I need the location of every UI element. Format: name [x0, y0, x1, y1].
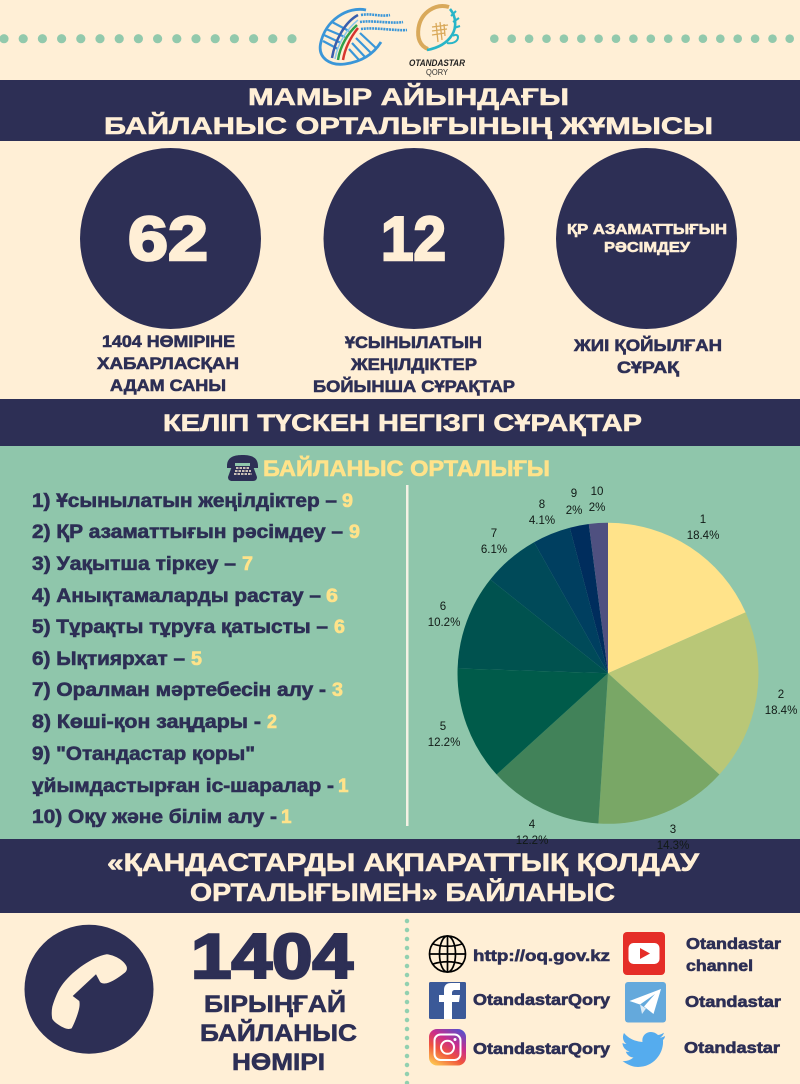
section band: contact: «ҚАНДАСТАРДЫ АҚПАРАТТЫҚ ҚОЛДАУ [107, 849, 700, 877]
list of questions: 8) Көші-қон заңдары - [32, 712, 261, 733]
title band: БАЙЛАНЫС ОРТАЛЫҒЫНЫҢ ЖҰМЫСЫ [104, 112, 713, 140]
title band [0, 80, 800, 141]
pie chart: 3 [670, 824, 676, 836]
stat: 62 calls: ХАБАРЛАСҚАН [97, 354, 239, 373]
stat: frequent question: РӘСІМДЕУ [604, 239, 691, 256]
dotted row: top left [0, 34, 297, 43]
dotted row: top right [490, 34, 794, 43]
link: twitter: Otandastar [684, 1040, 780, 1057]
pie chart: 2% [589, 502, 605, 514]
list of questions: 6) Ықтиярхат – [32, 649, 185, 670]
pie chart: 10.2% [428, 617, 460, 629]
stat: 62 calls: 62 [128, 205, 208, 274]
pie chart: 6.1% [481, 544, 507, 556]
icon: globe [430, 936, 466, 972]
list of questions: 3) Уақытша тіркеу – [32, 554, 236, 575]
list of questions: 3 [332, 680, 343, 701]
list of questions: 6 [326, 586, 338, 607]
pie chart: 7 [491, 528, 497, 540]
pie chart: 9 [571, 488, 577, 500]
icon: telegram [625, 982, 666, 1022]
stat: 12 questions [313, 148, 515, 396]
section band: main questions: КЕЛІП ТҮСКЕН НЕГІЗГІ СҰРАҚТАР [163, 410, 642, 437]
list of questions: 1) Ұсынылатын жеңілдіктер – [32, 491, 337, 512]
list of questions: 2) ҚР азаматтығын рәсімдеу – [32, 522, 343, 543]
section band: contact: 14.3% [657, 840, 689, 852]
heading: contact centre: БАЙЛАНЫС ОРТАЛЫҒЫ [263, 456, 550, 481]
hotline number block: НӨМІРІ [232, 1049, 325, 1076]
list of questions: 7) Оралман мәртебесін алу - [32, 680, 326, 701]
stat: 12 questions: ҰСЫНЫЛАТЫН [345, 333, 482, 352]
section band: contact [0, 835, 800, 913]
list of questions: 5) Тұрақты тұруға қатысты – [32, 617, 328, 638]
pie chart: 12.2% [428, 737, 460, 749]
list of questions: 10) Оқу және білім алу - [32, 807, 277, 828]
stat: frequent question [556, 148, 737, 377]
hotline number block: БАЙЛАНЫС [200, 1019, 357, 1047]
stat: 62 calls: АДАМ САНЫ [110, 376, 226, 395]
link: telegram: Otandastar [685, 994, 781, 1011]
link: facebook: OtandastarQory [473, 992, 610, 1009]
link: instagram: OtandastarQory [473, 1041, 610, 1058]
stat: frequent question: СҰРАҚ [617, 358, 680, 377]
hotline number block [191, 922, 357, 1076]
pie chart: 5 [440, 721, 446, 733]
list of questions: 2 [267, 712, 277, 733]
list of questions: ұйымдастырған іс-шаралар - [32, 776, 334, 797]
list of questions: 7 [242, 554, 253, 575]
icon: youtube [623, 932, 665, 975]
pie chart: 4 [529, 819, 536, 831]
pie chart: 2 [778, 689, 784, 701]
pie chart: 8 [539, 499, 545, 511]
panel: green background [0, 446, 800, 839]
list of questions: 1 [338, 776, 349, 797]
list of questions [32, 491, 360, 828]
stat: 62 calls: 1404 НӨМІРІНЕ [102, 332, 235, 351]
icon: twitter [622, 1032, 665, 1067]
icon: telephone [227, 455, 258, 481]
icon: facebook [429, 982, 466, 1019]
section band: contact: 12.2% [516, 835, 548, 847]
stat: 62 calls [80, 148, 261, 395]
list of questions: 6 [334, 617, 345, 638]
pie chart: 18.4% [687, 530, 719, 542]
list of questions: 5 [191, 649, 202, 670]
hotline number block: БІРЫҢҒАЙ [204, 990, 346, 1018]
list of questions: 9) "Отандастар қоры" [32, 744, 255, 765]
list of questions: 9 [342, 491, 353, 512]
stat: 12 questions: 12 [381, 205, 446, 274]
logo: Otandastar Qory [409, 6, 465, 77]
list of questions: 4) Анықтамаларды растау – [32, 586, 321, 607]
section band: contact: ОРТАЛЫҒЫМЕН» БАЙЛАНЫС [190, 877, 615, 907]
pie chart: 2% [566, 505, 582, 517]
pie chart: 6 [440, 601, 446, 613]
stat: 12 questions: БОЙЫНША СҰРАҚТАР [313, 377, 515, 396]
logo: Otandastar Qory: OTANDASTAR [409, 58, 465, 68]
icon: phone circle [24, 925, 154, 1054]
stat: 12 questions: ЖЕҢІЛДІКТЕР [350, 355, 477, 374]
pie chart: 1 [700, 514, 706, 526]
pie chart [428, 486, 797, 836]
link: youtube: channel [686, 958, 753, 975]
icon: instagram [429, 1029, 466, 1066]
logo: ball emblem [320, 9, 407, 64]
stat: frequent question: ҚР АЗАМАТТЫҒЫН [567, 221, 727, 238]
title band: МАМЫР АЙЫНДАҒЫ [248, 83, 569, 111]
pie chart: 18.4% [765, 705, 797, 717]
link: youtube [686, 936, 781, 975]
hotline number block: 1404 [191, 922, 353, 992]
link: website: http://oq.gov.kz [473, 948, 610, 965]
pie chart: 10 [591, 486, 603, 498]
section band: main questions [0, 399, 800, 446]
list of questions: 9 [349, 522, 360, 543]
link: youtube: Otandastar [686, 936, 781, 953]
stat: frequent question: ЖИІ ҚОЙЫЛҒАН [573, 336, 722, 355]
list of questions: 1 [281, 807, 292, 828]
logo: Otandastar Qory: QORY [426, 68, 449, 77]
pie chart: 4.1% [529, 515, 555, 527]
